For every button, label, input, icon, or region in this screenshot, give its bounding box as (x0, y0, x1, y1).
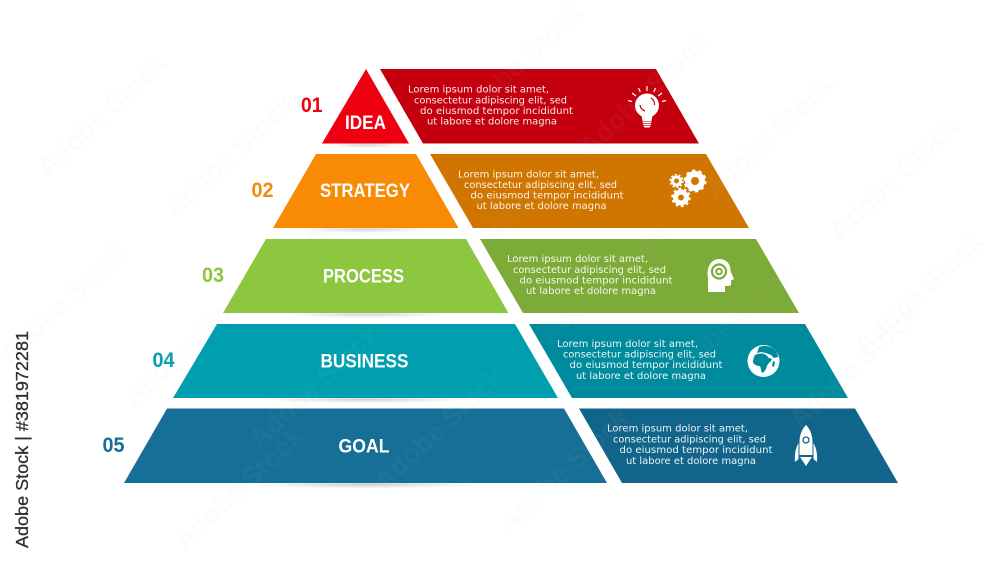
watermark: repeated adobe stock pattern: Adobe Stock (533, 215, 675, 350)
heading: strategy: STRATEGY (320, 181, 410, 202)
panel: level 5 goal (102, 408, 898, 488)
text block: goal description: consectetur adipiscing elit, sed (613, 434, 766, 446)
text block: strategy description: consectetur adipiscing elit, sed (464, 180, 617, 191)
number: 04: 04 (152, 349, 175, 372)
shape: idea triangle (322, 69, 409, 144)
watermark: repeated adobe stock pattern: Adobe Stock (243, 319, 385, 454)
text block: strategy description (458, 170, 624, 212)
text block: goal description: ut labore et dolore magna (626, 456, 756, 467)
watermark: repeated adobe stock pattern: Adobe Stock (31, 48, 173, 183)
text block: strategy description: do eiusmod tempor incididunt (470, 190, 624, 202)
panel: level 4 business (152, 324, 848, 403)
shape: business description band (529, 324, 848, 398)
watermark: repeated adobe stock pattern: Adobe Stock (168, 421, 310, 556)
icon: globe (748, 345, 780, 377)
watermark: repeated adobe stock pattern: Adobe Stock (493, 403, 635, 538)
text block: process description: Lorem ipsum dolor sit amet, (507, 254, 648, 265)
text block: business description: Lorem ipsum dolor sit amet, (557, 339, 698, 350)
text block: idea description (408, 84, 573, 128)
shape: goal trapezoid (124, 408, 607, 483)
text block: idea description: do eiusmod tempor incididunt (420, 106, 573, 117)
watermark: repeated adobe stock pattern: Adobe Stock (823, 111, 965, 246)
icon: light bulb (628, 86, 666, 128)
watermark: repeated adobe stock pattern: Adobe Stock (368, 361, 510, 496)
watermark: repeated adobe stock pattern: Adobe Stock (408, 173, 550, 308)
heading: idea: IDEA (345, 113, 386, 134)
watermark: repeated adobe stock pattern: Adobe Stock (698, 69, 840, 204)
panel: level 2 strategy (252, 154, 749, 233)
text block: idea description: Lorem ipsum dolor sit amet, (408, 84, 549, 96)
watermark: repeated adobe stock pattern: Adobe Stock (573, 27, 715, 162)
shape: strategy trapezoid (273, 154, 458, 228)
text block: business description: do eiusmod tempor incididunt (570, 360, 723, 371)
shape: strategy description band (430, 154, 749, 228)
text block: idea description: ut labore et dolore magna (427, 116, 557, 128)
shape: idea description band (380, 69, 699, 144)
watermark: repeated adobe stock pattern: Adobe Stock (118, 277, 260, 412)
panel: level 1 idea (301, 69, 699, 148)
text block: business description: consectetur adipiscing elit, sed (563, 350, 716, 360)
text block: business description (557, 339, 723, 382)
icon: gears (670, 170, 706, 206)
heading: business: BUSINESS (320, 352, 408, 372)
text block: process description: consectetur adipiscing elit, sed (513, 265, 666, 276)
shape: process description band (480, 239, 799, 313)
text block: goal description: do eiusmod tempor incididunt (620, 445, 773, 456)
number: 05: 05 (102, 434, 125, 457)
icon: rocket (795, 425, 817, 466)
shape: process trapezoid (223, 239, 508, 313)
shape: goal description band (579, 408, 898, 483)
watermark: repeated adobe stock pattern: Adobe Stock (848, 226, 990, 361)
watermark: repeated adobe stock pattern: Adobe Stock (783, 299, 925, 434)
heading: goal: GOAL (338, 436, 390, 458)
watermark: adobe stock id: Adobe Stock | #381972281 (12, 331, 32, 548)
number: 02: 02 (252, 179, 274, 202)
watermark: repeated adobe stock pattern: Adobe Stock (283, 131, 425, 266)
text block: idea description: consectetur adipiscing elit, sed (414, 96, 567, 106)
watermark: repeated adobe stock pattern: Adobe Stock (658, 257, 800, 392)
icon: head with target (708, 259, 734, 292)
number: 01: 01 (301, 94, 323, 117)
text block: goal description: Lorem ipsum dolor sit amet, (607, 424, 748, 434)
text block: process description: do eiusmod tempor incididunt (520, 276, 673, 286)
watermark: repeated adobe stock pattern: Adobe Stock (158, 89, 300, 224)
text block: process description (507, 254, 673, 297)
panel: level 3 process (202, 239, 799, 318)
text block: strategy description: Lorem ipsum dolor sit amet, (458, 170, 599, 180)
text block: strategy description: ut labore et dolore magna (476, 201, 606, 212)
watermark: repeated adobe stock pattern: Adobe Stock (448, 0, 590, 131)
text block: business description: ut labore et dolore magna (576, 371, 706, 382)
text block: goal description (607, 424, 773, 467)
text block: process description: ut labore et dolore magna (526, 286, 656, 297)
number: 03: 03 (202, 264, 224, 287)
shape: business trapezoid (173, 324, 558, 398)
heading: process: PROCESS (323, 266, 404, 288)
